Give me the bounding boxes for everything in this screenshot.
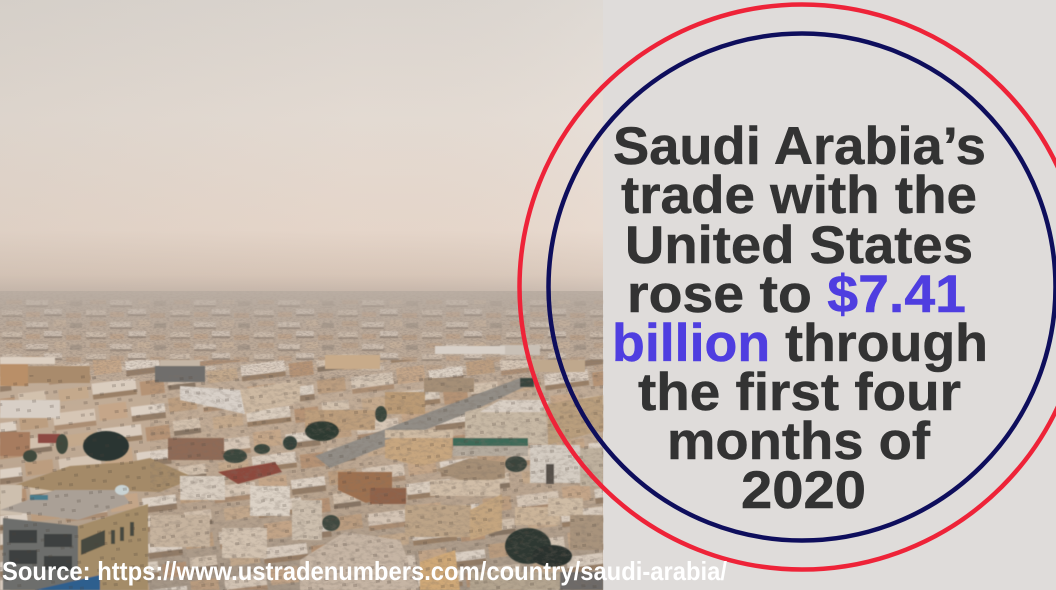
photo: hazy sky	[0, 0, 603, 295]
tan courtyard block	[385, 430, 452, 466]
headline statistic	[612, 117, 988, 520]
headline line 5 with highlighted unit: billion through	[612, 314, 988, 373]
circle: navy inner ring	[548, 34, 1056, 540]
large beige building	[465, 402, 548, 445]
photo: city ground with texture	[0, 291, 603, 590]
hillside mound	[15, 458, 195, 492]
white villa	[530, 445, 580, 483]
bottom foreground roofs	[300, 532, 420, 590]
photo: window and rooftop detail	[0, 375, 603, 590]
far right blocks	[500, 345, 540, 355]
headline line 3: United States	[625, 216, 973, 275]
photo: buildings	[0, 345, 603, 590]
headline line 2: trade with the	[621, 166, 977, 225]
sign banner	[35, 575, 100, 590]
low arched building	[405, 505, 471, 537]
circle: red outer ring	[520, 4, 1056, 570]
headline line 6: the first four	[638, 363, 961, 422]
middle left blocks	[325, 355, 380, 369]
headline line 1: Saudi Arabia’s	[613, 117, 986, 176]
panel: grey right background	[603, 0, 1056, 590]
headline line 7: months of	[667, 412, 930, 471]
photo: Riyadh city skyline	[0, 0, 603, 590]
bottom left office block	[0, 485, 22, 515]
palm trees	[505, 528, 551, 564]
headline line 4 with highlighted amount: rose to $7.41	[627, 265, 966, 324]
left mid buildings	[0, 357, 55, 364]
trees	[83, 431, 129, 461]
source citation: Source: https://www.ustradenumbers.com/country/saudi-arabia/	[2, 556, 727, 586]
brick house	[338, 472, 392, 503]
sandy lot	[435, 458, 505, 484]
centre white houses	[180, 476, 225, 500]
headline line 8: 2020	[741, 461, 866, 520]
red roof	[218, 462, 282, 484]
long white building	[180, 380, 300, 414]
middle road	[315, 378, 535, 468]
